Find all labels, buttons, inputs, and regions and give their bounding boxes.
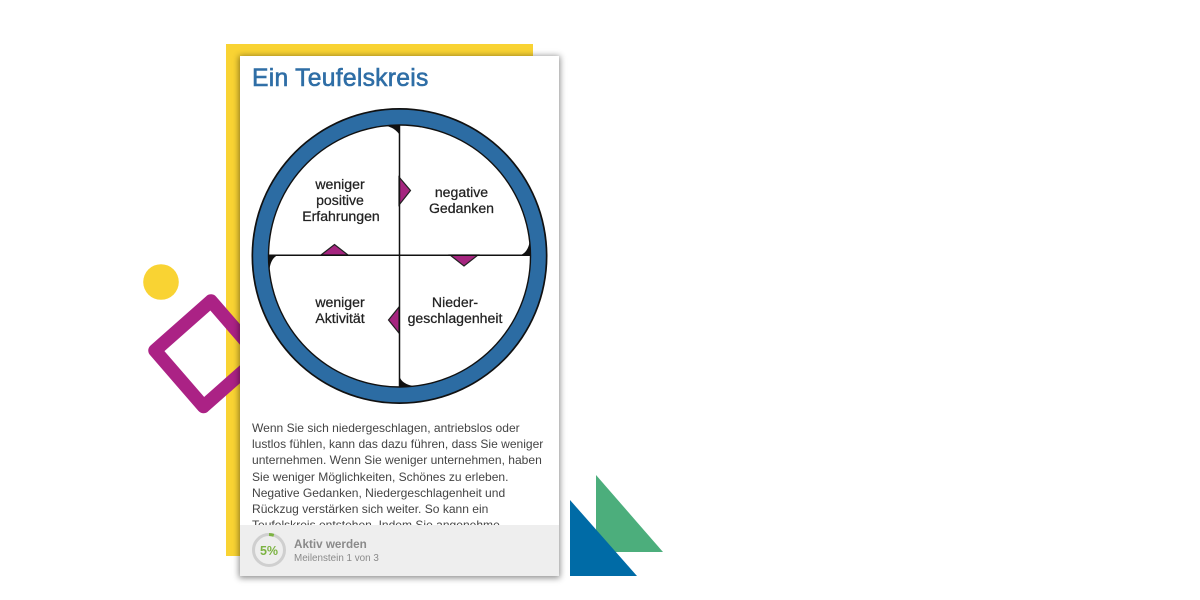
quadrant labels: geschlagenheit	[408, 310, 502, 326]
progress ring 5%: 5%	[260, 544, 278, 558]
body text: Negative Gedanken, Niedergeschlagenheit und	[252, 486, 505, 500]
arrow: right bottom diamond	[450, 255, 478, 266]
decoration: blue triangle	[570, 500, 637, 576]
body text: lustlos fühlen, kann das dazu führen, dass Sie weniger	[252, 437, 543, 451]
quadrant labels: weniger	[314, 176, 365, 192]
blue ring	[252, 108, 548, 404]
arrow: top right diamond	[399, 177, 410, 205]
title: Ein Teufelskreis	[252, 65, 429, 92]
body text: Teufelskreis entstehen. Indem Sie angenehme	[252, 518, 500, 532]
arrow: bottom left diamond	[388, 307, 399, 333]
milestone subtitle: Meilenstein 1 von 3	[294, 553, 379, 564]
black corner wedges	[268, 125, 531, 387]
panel: phone card	[240, 56, 559, 576]
decoration: yellow circle	[143, 264, 179, 300]
background panel: yellow rectangle	[226, 44, 533, 556]
chart: vicious circle diagram	[252, 108, 548, 404]
body text: Sie weniger Möglichkeiten, Schönes zu erleben.	[252, 470, 508, 484]
body text	[252, 421, 544, 532]
body text: Rückzug verstärken sich weiter. So kann ein	[252, 502, 488, 516]
quadrant labels: Erfahrungen	[302, 208, 380, 224]
quadrant labels: weniger	[314, 294, 365, 310]
quadrant labels: positive	[316, 192, 364, 208]
body text: Wenn Sie sich niedergeschlagen, antriebslos oder	[252, 421, 520, 435]
quadrant labels: negative	[435, 184, 488, 200]
footer: progress bar	[240, 525, 559, 576]
body text: unternehmen. Wenn Sie weniger unternehmen, haben	[252, 453, 542, 467]
quadrant labels: Nieder-	[432, 294, 478, 310]
decoration: purple diamond outline	[148, 294, 240, 414]
milestone title: Aktiv werden	[294, 538, 367, 551]
decoration: green triangle	[596, 475, 663, 552]
arrow: left top diamond	[321, 244, 348, 255]
quadrant labels: Aktivität	[315, 310, 365, 326]
progress ring 5%	[252, 533, 286, 567]
cross dividers	[268, 125, 531, 387]
quadrant labels	[302, 176, 502, 326]
quadrant labels: Gedanken	[429, 200, 494, 216]
